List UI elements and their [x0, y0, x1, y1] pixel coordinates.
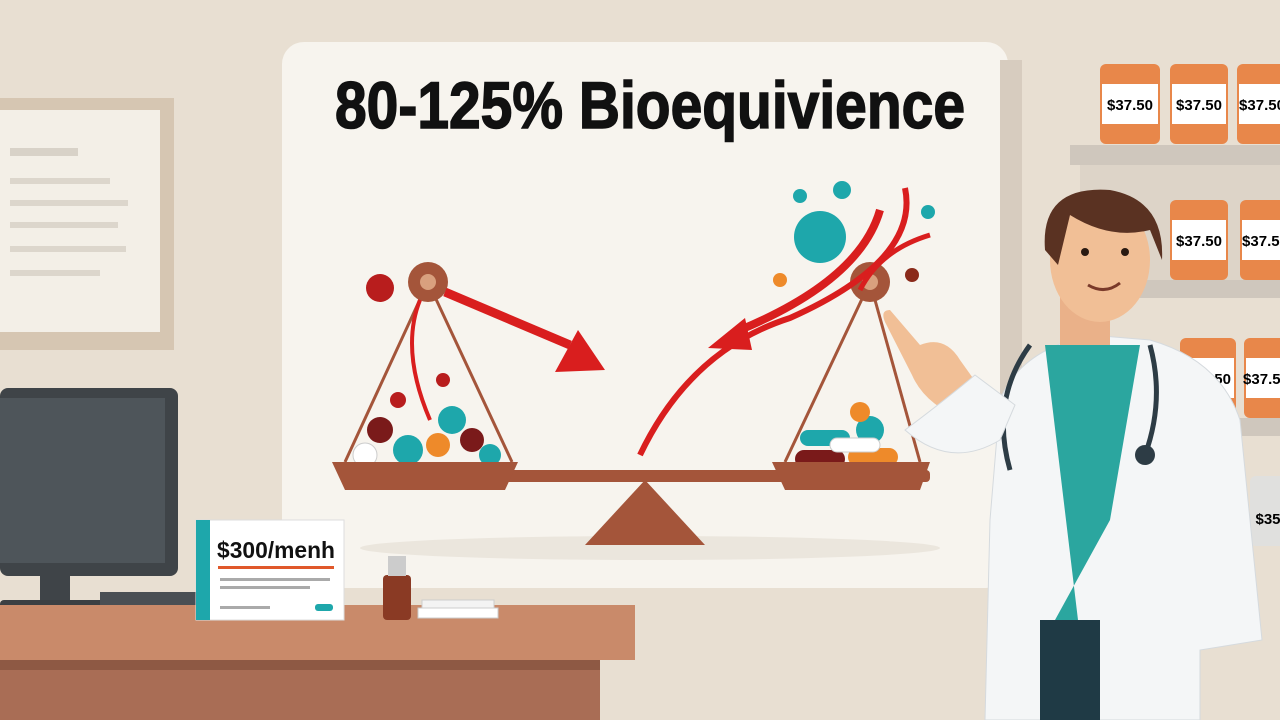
wall frame: notice — [0, 98, 174, 350]
doctor — [883, 190, 1262, 720]
shelves with price bottles: $37.50 — [1185, 371, 1231, 388]
drug box $300/month: $300/menh — [217, 537, 335, 563]
shelves with price bottles: $37.50 — [1176, 233, 1222, 250]
shelves with price bottles — [1070, 64, 1280, 546]
shelves with price bottles: $35 — [1255, 511, 1280, 528]
drug box $300/month — [196, 520, 344, 620]
desk — [0, 605, 635, 720]
left pan — [332, 262, 518, 490]
blister pack — [418, 600, 498, 618]
title: 80-125% Bioequivience — [335, 68, 965, 142]
shelves with price bottles: $37.50 — [1176, 97, 1222, 114]
small bottle — [383, 556, 411, 620]
monitor — [0, 388, 200, 620]
shelves with price bottles: $37.50 — [1107, 97, 1153, 114]
balance scale — [332, 181, 940, 560]
arrow left — [412, 292, 605, 420]
board — [282, 42, 1022, 588]
pointing hand — [883, 310, 985, 420]
right pan — [772, 181, 935, 490]
arrow right — [640, 188, 930, 455]
